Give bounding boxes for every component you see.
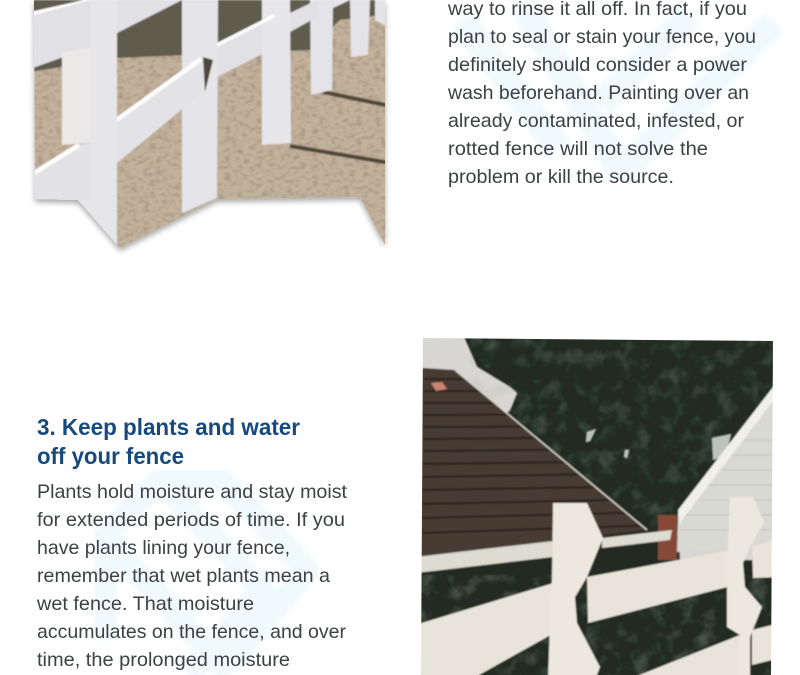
sky <box>422 338 753 562</box>
photo: white vinyl fence on gravel <box>30 0 390 250</box>
text block: power wash advice: rotted fence will not solve the <box>448 138 708 160</box>
house gable trim <box>676 386 773 524</box>
text block: tip 3 body: accumulates on the fence, and over <box>37 621 346 643</box>
chimney <box>658 515 677 560</box>
text block: power wash advice <box>447 0 756 188</box>
watermark: left diamonds <box>105 480 308 675</box>
centre rail <box>116 75 182 164</box>
roof repair patch <box>431 382 447 391</box>
nearest post <box>78 0 117 250</box>
text block: power wash advice: plan to seal or stain your fence, you <box>448 26 756 48</box>
rails <box>30 0 317 145</box>
text block: tip 3 body: have plants lining your fence, <box>37 537 290 559</box>
text block: power wash advice: already contaminated, infested, or <box>448 110 745 132</box>
roof <box>415 368 647 557</box>
centre post <box>182 0 218 213</box>
fence rails <box>415 538 780 675</box>
lower left rail <box>30 143 91 204</box>
text block: tip 3 body: wet fence. That moisture <box>36 593 254 615</box>
fence shadows <box>290 92 390 163</box>
text block: tip 3 body: Plants hold moisture and stay moist <box>37 481 348 503</box>
text block: tip 3 body: time, the prolonged moisture <box>37 649 290 671</box>
tree texture <box>470 335 780 530</box>
foliage texture <box>421 575 776 675</box>
dark notch <box>203 57 213 92</box>
heading: tip 3: off your fence <box>37 443 184 469</box>
heading: tip 3 <box>37 414 300 469</box>
dark lower foliage <box>421 556 772 675</box>
gravel texture <box>34 18 385 246</box>
text block: power wash advice: problem or kill the source. <box>448 166 674 188</box>
text block: tip 3 body: remember that wet plants mean a <box>37 565 330 587</box>
post near right <box>262 0 291 145</box>
gravel ground <box>30 0 390 250</box>
far posts <box>310 0 390 95</box>
sky gaps <box>586 429 731 460</box>
roof ridge edge <box>455 370 647 530</box>
text block: tip 3 body <box>36 481 348 671</box>
house siding <box>676 418 772 554</box>
top rail highlight <box>34 0 90 16</box>
watermark: right chevrons <box>462 10 775 172</box>
rail highlight <box>217 14 275 47</box>
text block: tip 3 body: for extended periods of time. If you <box>37 509 345 531</box>
gutters <box>415 530 672 573</box>
roof tile lines <box>420 379 660 533</box>
photo: white wooden fence before house and roof <box>415 333 780 675</box>
text block: power wash advice: wash beforehand. Painting over an <box>447 82 749 104</box>
fence posts <box>548 497 764 675</box>
dark background band <box>30 0 390 72</box>
text block: power wash advice: definitely should consider a power <box>448 54 748 76</box>
heading: tip 3: 3. Keep plants and water <box>37 414 300 440</box>
siding lines <box>680 440 780 530</box>
tree <box>463 335 780 560</box>
